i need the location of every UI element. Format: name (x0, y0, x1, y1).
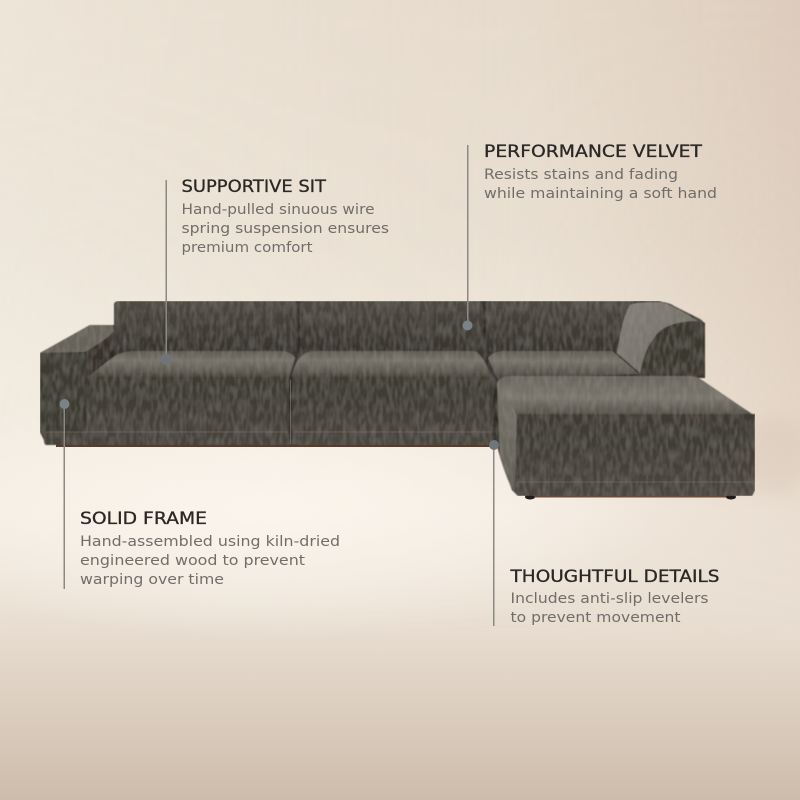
heading: SUPPORTIVE SIT (182, 177, 327, 196)
floor shadow and plinth (56, 438, 736, 500)
right seat (488, 351, 639, 379)
leader line and dot (160, 180, 172, 364)
cushion seams (46, 380, 753, 482)
heading: SOLID FRAME (80, 509, 207, 528)
callout: thoughtful details (489, 440, 720, 626)
description: engineered wood to prevent (80, 553, 306, 569)
callout: solid frame (60, 399, 340, 589)
heading: THOUGHTFUL DETAILS (509, 567, 720, 586)
description: spring suspension ensures (182, 221, 389, 237)
leader line and dot (462, 145, 472, 330)
description (182, 202, 389, 256)
middle seat (292, 351, 493, 445)
heading: PERFORMANCE VELVET (484, 142, 703, 161)
description: Includes anti-slip levelers (510, 591, 708, 607)
description (80, 534, 340, 588)
sectional sofa (40, 301, 755, 500)
callout: supportive sit (160, 177, 389, 364)
description: Hand-pulled sinuous wire (182, 202, 374, 218)
sofa upholstery (40, 301, 755, 496)
leader line and dot (489, 440, 499, 626)
description: premium comfort (182, 240, 313, 256)
ottoman (497, 376, 755, 496)
description (484, 167, 717, 202)
description: warping over time (80, 572, 224, 588)
left seat and inner arm (86, 328, 295, 445)
description: to prevent movement (510, 610, 681, 626)
description: Hand-assembled using kiln-dried (80, 534, 340, 550)
leader line and dot (60, 399, 70, 589)
sofa silhouette (40, 301, 755, 496)
description: Resists stains and fading (484, 167, 678, 183)
back cushions (114, 301, 634, 356)
left arm (40, 325, 289, 445)
description (510, 591, 708, 626)
callout: performance velvet (462, 142, 717, 330)
description: while maintaining a soft hand (484, 186, 717, 202)
right arm (617, 302, 705, 378)
